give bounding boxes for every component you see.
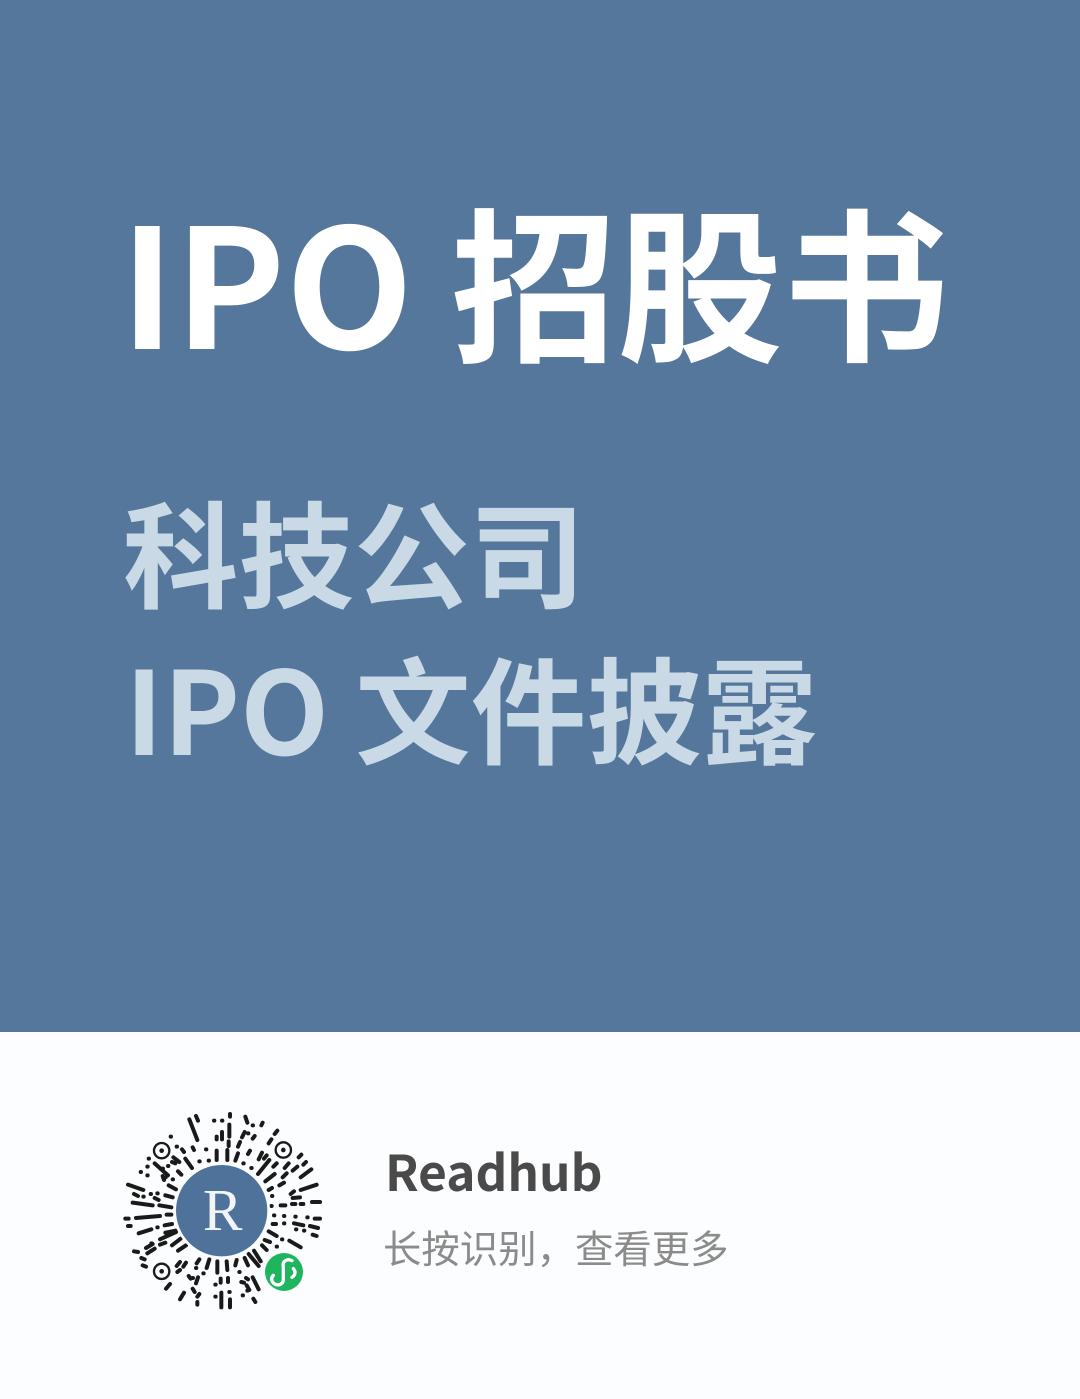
icon: mini program badge bbox=[263, 1251, 305, 1293]
centre logo: R bbox=[203, 1177, 243, 1243]
finder rings bbox=[154, 1142, 291, 1279]
panel: footer bbox=[0, 1032, 1080, 1399]
brand name: Readhub bbox=[385, 1135, 602, 1206]
subtitle: 科技公司 bbox=[123, 466, 585, 633]
centre logo bbox=[173, 1162, 270, 1259]
icon: mini program code bbox=[123, 1112, 322, 1310]
panel: blue cover bbox=[0, 0, 1080, 1032]
code strokes bbox=[125, 1114, 320, 1307]
title: IPO 招股书 bbox=[120, 156, 949, 397]
subtitle bbox=[123, 466, 817, 789]
call to action: 长按识别，查看更多 bbox=[383, 1219, 729, 1275]
finder centres bbox=[159, 1148, 286, 1274]
subtitle: IPO 文件披露 bbox=[125, 622, 817, 789]
